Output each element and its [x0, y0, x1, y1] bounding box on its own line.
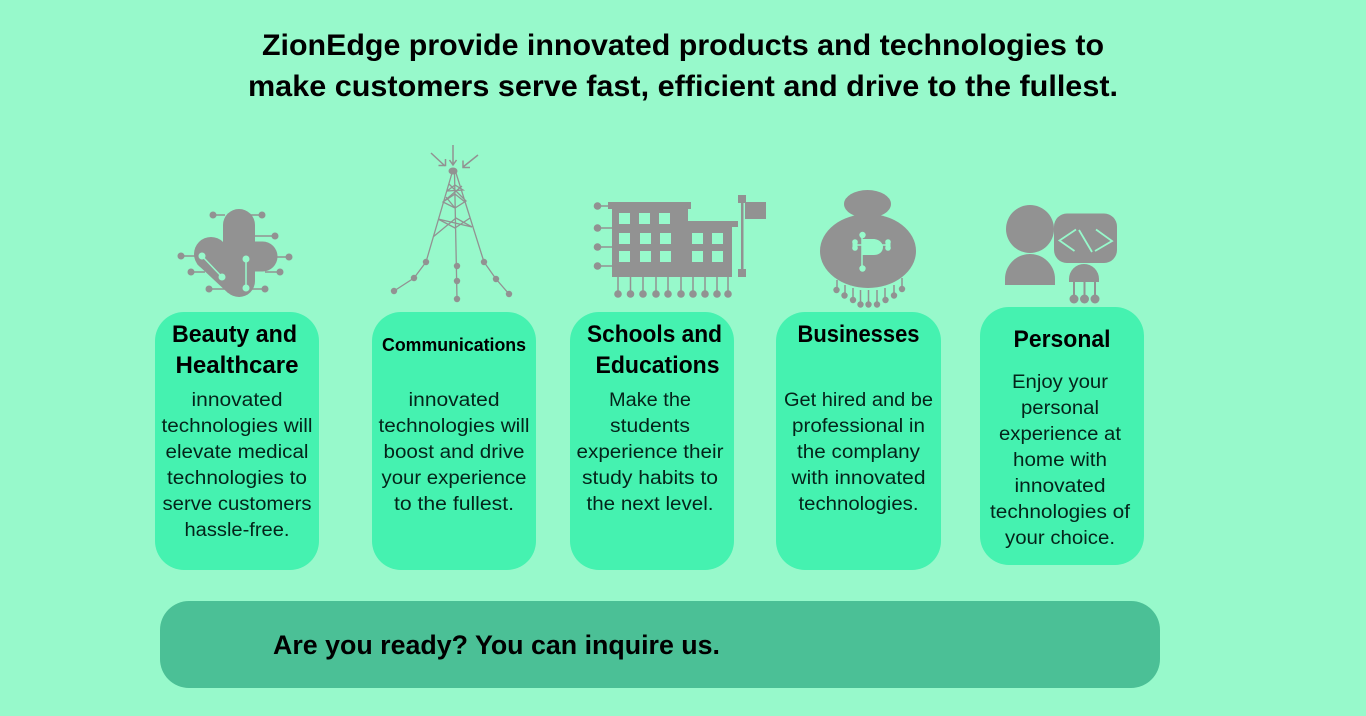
text: personal body: technologies of — [990, 502, 1131, 523]
panel: schools and educations — [570, 312, 734, 570]
text: businesses body: professional in — [792, 416, 925, 437]
text: personal body: innovated — [1014, 476, 1106, 497]
title — [248, 29, 1118, 103]
text: communications body: to the fullest. — [394, 494, 514, 515]
text: communications body: innovated — [408, 390, 500, 411]
title: ZionEdge provide innovated products and technologies to — [262, 29, 1104, 62]
icon: person with code — [1005, 205, 1117, 304]
heading: businesses: Businesses — [798, 321, 920, 348]
text: healthcare body: elevate medical — [166, 442, 308, 463]
text: businesses body: the complany — [797, 442, 921, 463]
icon: school building — [594, 195, 766, 298]
text: businesses body: technologies. — [798, 494, 918, 515]
text: communications body: your experience — [382, 468, 526, 489]
text: healthcare body: technologies to — [167, 468, 307, 489]
title: make customers serve fast, efficient and drive to the fullest. — [248, 70, 1118, 103]
text: schools body: Make the — [609, 390, 691, 411]
text: schools body: students — [610, 416, 690, 437]
text: communications body: boost and drive — [384, 442, 524, 463]
heading: communications: Communications — [382, 335, 526, 355]
text: personal body: personal — [1021, 398, 1099, 419]
call to action text: Are you ready? You can inquire us. — [273, 630, 720, 660]
text: communications body: technologies will — [378, 416, 530, 437]
text: businesses body: Get hired and be — [784, 390, 933, 411]
text: personal body — [990, 372, 1131, 549]
text: healthcare body: technologies will — [162, 416, 312, 437]
text: personal body: Enjoy your — [1012, 372, 1109, 393]
panel: beauty and healthcare — [155, 312, 319, 570]
text: healthcare body: serve customers — [162, 494, 312, 515]
text: businesses body — [784, 390, 933, 515]
text: healthcare body: innovated — [192, 390, 282, 411]
call to action bar — [160, 601, 1160, 688]
text: schools body: experience their — [576, 442, 724, 463]
text: healthcare body: hassle-free. — [184, 520, 290, 541]
text: schools body: the next level. — [586, 494, 714, 515]
text: communications body — [378, 390, 530, 515]
icon: healthcare cross circuit — [178, 209, 292, 297]
text: schools body: study habits to — [582, 468, 718, 489]
icon: communications tower — [391, 145, 512, 302]
text: healthcare body — [162, 390, 312, 541]
heading: beauty and healthcare: Healthcare — [176, 352, 298, 379]
heading: schools and educations — [587, 321, 722, 379]
heading: personal: Personal — [1014, 326, 1110, 353]
text: personal body: experience at — [999, 424, 1122, 445]
text: personal body: your choice. — [1005, 528, 1115, 549]
text: personal body: home with — [1013, 450, 1107, 471]
heading: beauty and healthcare: Beauty and — [172, 321, 297, 348]
panel: communications — [372, 312, 536, 570]
text: businesses body: with innovated — [790, 468, 926, 489]
heading: schools and educations: Schools and — [587, 321, 722, 348]
panel: businesses — [776, 312, 941, 570]
panel: personal — [980, 307, 1144, 565]
heading: schools and educations: Educations — [596, 352, 720, 379]
icon: business money bag — [820, 190, 916, 308]
text: schools body — [576, 390, 724, 515]
icon: flag on pole — [738, 195, 766, 277]
heading: beauty and healthcare — [172, 321, 298, 379]
